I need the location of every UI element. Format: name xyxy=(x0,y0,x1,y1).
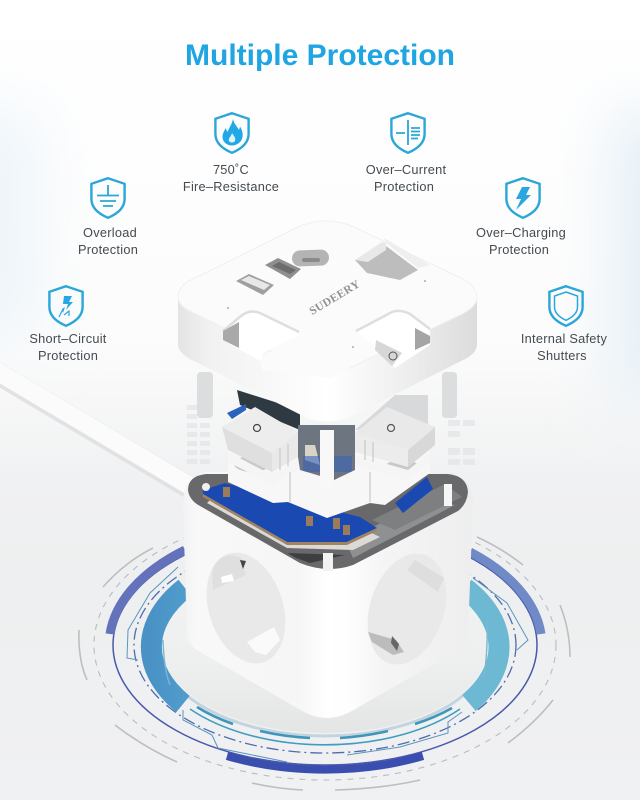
usb port 2 xyxy=(265,258,301,279)
label: over-charging xyxy=(476,225,566,257)
grey dashed ring xyxy=(94,510,556,780)
label: over-current: Protection xyxy=(374,179,434,194)
label: fire resistance xyxy=(183,162,279,194)
right switch side xyxy=(355,433,408,467)
rim interior xyxy=(188,474,468,569)
navy thin ring xyxy=(113,525,537,765)
label: overload: Protection xyxy=(78,242,138,257)
centre post xyxy=(320,430,334,488)
housing ribs xyxy=(280,440,373,502)
circuit board right xyxy=(395,477,433,513)
lower housing xyxy=(228,448,430,518)
cover side xyxy=(178,296,477,422)
internal switch modules xyxy=(222,390,435,518)
label: safety shutters: Shutters xyxy=(537,348,587,363)
label: overload xyxy=(78,225,138,257)
dark gap left xyxy=(237,390,300,430)
left deck xyxy=(207,495,380,550)
thick teal bottom segments xyxy=(197,707,452,738)
right deck xyxy=(345,500,455,558)
title: Multiple Protection xyxy=(185,39,455,72)
pale inner ring xyxy=(159,554,491,736)
light gap right xyxy=(355,395,428,430)
label: fire resistance: 750˚C xyxy=(213,162,249,177)
grey outer arcs xyxy=(79,537,570,790)
screw dots xyxy=(227,280,426,348)
pcb tab left xyxy=(227,404,246,419)
ground disc xyxy=(162,557,488,733)
icon: safety shutter shield xyxy=(549,286,583,326)
circuit rings xyxy=(79,510,570,790)
pcb centre xyxy=(298,425,355,478)
left switch top xyxy=(222,407,298,453)
label: fire resistance: Fire–Resistance xyxy=(183,179,279,194)
top right notch xyxy=(355,243,418,280)
right switch top xyxy=(355,407,435,450)
thin teal bottom line xyxy=(190,709,460,745)
cube socket body xyxy=(183,472,473,718)
brand logo: SUDEERY xyxy=(308,278,363,318)
right notch xyxy=(356,311,430,368)
usb port 1 xyxy=(236,274,274,295)
label: over-charging: Protection xyxy=(489,242,549,257)
bearing shade xyxy=(234,456,270,472)
icon: over-current shield xyxy=(391,113,425,153)
power icons xyxy=(254,424,260,432)
inner posts xyxy=(323,553,333,571)
teal thick bands xyxy=(151,588,185,704)
usb-c port xyxy=(292,249,329,267)
label: short-circuit: Protection xyxy=(38,348,98,363)
label: short-circuit xyxy=(29,331,107,363)
label: over-current xyxy=(366,162,446,194)
label: short-circuit: Short–Circuit xyxy=(29,331,107,346)
power cord xyxy=(0,370,200,494)
dash-dot circuit line xyxy=(134,537,516,753)
top cover xyxy=(178,221,477,422)
socket: right xyxy=(354,543,460,675)
background tech grid xyxy=(187,405,475,465)
socket: left xyxy=(193,542,299,674)
left notch xyxy=(223,312,299,362)
circuit board left xyxy=(203,483,377,542)
left switch side xyxy=(222,427,272,472)
label: safety shutters xyxy=(521,331,607,363)
thin teal right xyxy=(163,620,487,685)
capacitors xyxy=(223,487,350,535)
label: safety shutters: Internal Safety xyxy=(521,331,607,346)
icon: fire shield xyxy=(215,113,249,153)
icon: over-charging shield xyxy=(506,178,540,218)
label: over-current: Over–Current xyxy=(366,162,446,177)
label: over-charging: Over–Charging xyxy=(476,225,566,240)
label: overload: Overload xyxy=(83,225,137,240)
icon: short-circuit shield xyxy=(49,286,83,326)
cover top xyxy=(178,221,477,373)
guide pins xyxy=(197,372,457,418)
icon: ground shield xyxy=(91,178,125,218)
navy thick arcs xyxy=(110,550,185,634)
circuit traces xyxy=(127,567,528,762)
